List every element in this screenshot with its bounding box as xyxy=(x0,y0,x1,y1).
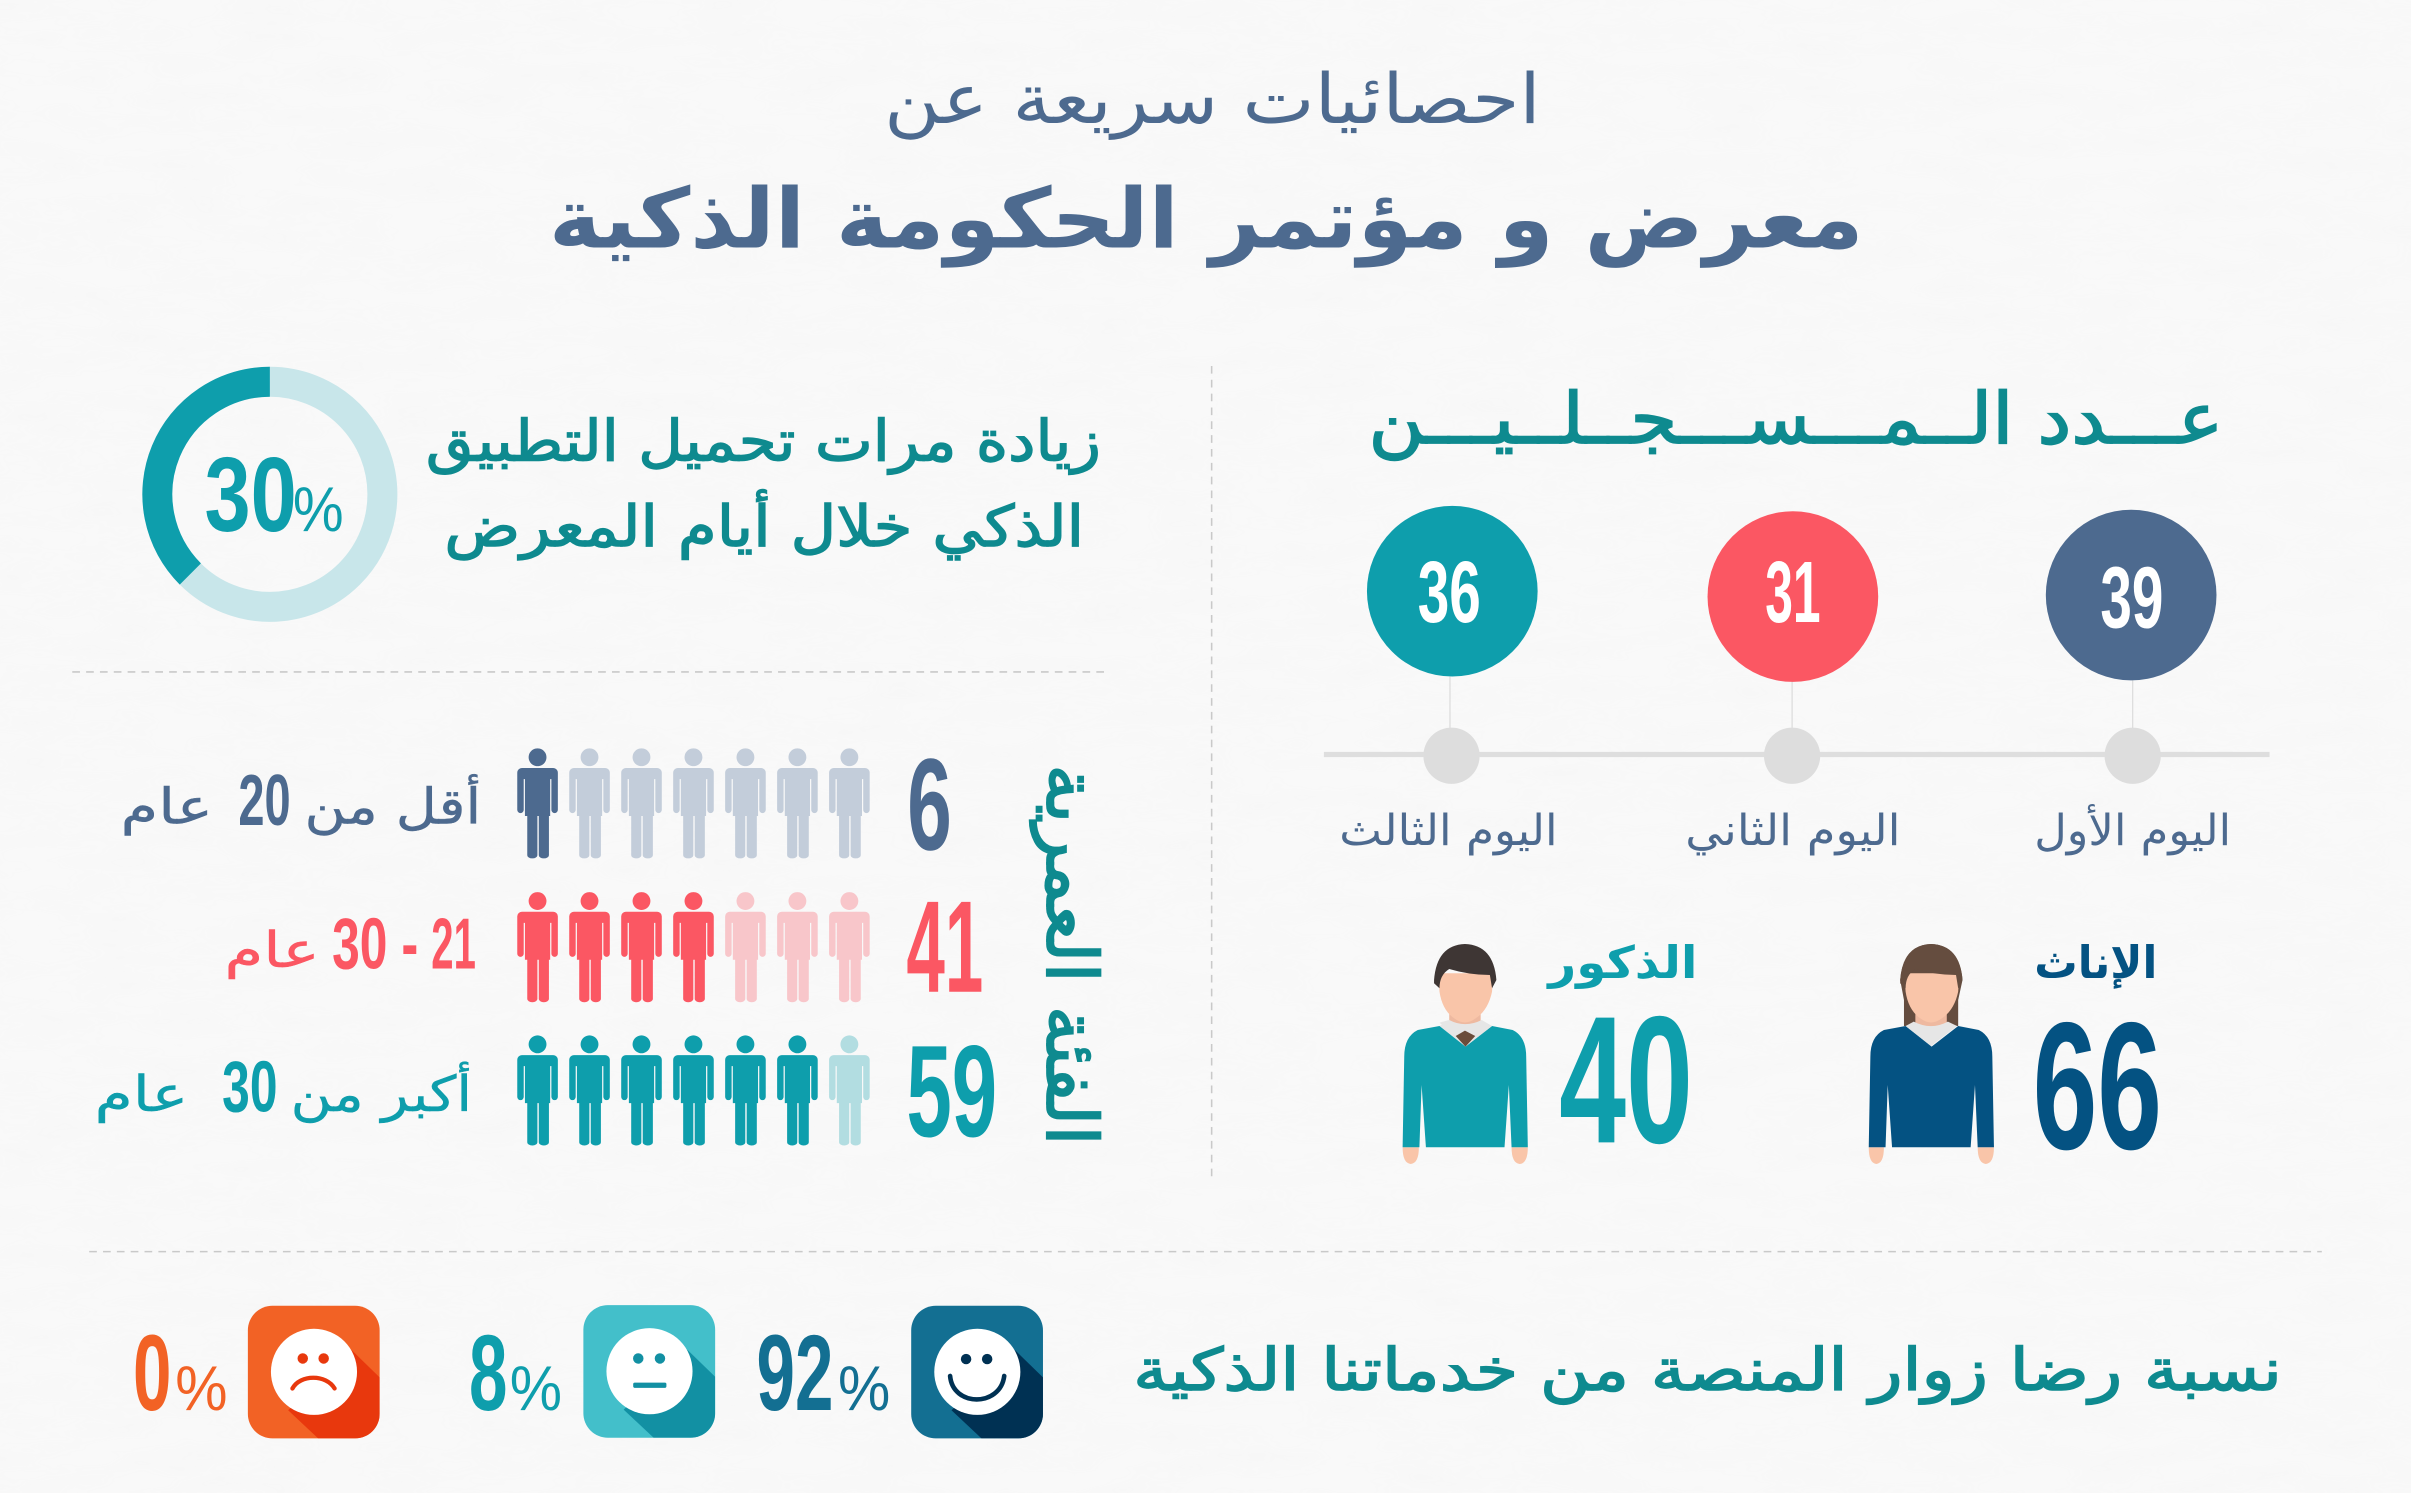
donut chart xyxy=(157,382,382,607)
day 2 circle: 31 xyxy=(1765,543,1821,641)
app text xyxy=(426,409,1101,560)
app text: الذكي خلال أيام المعرض xyxy=(444,489,1084,560)
label: over 30 xyxy=(95,1048,472,1128)
day labels: اليوم الثالث xyxy=(1339,806,1558,856)
day labels: اليوم الثاني xyxy=(1685,806,1901,856)
label: 21-30: عام xyxy=(224,921,320,979)
donut chart: % xyxy=(293,475,344,545)
value: 8 percent: 8 xyxy=(469,1313,507,1433)
label: under 20: 20 xyxy=(238,761,291,841)
value: 8 percent xyxy=(469,1313,562,1433)
male label: الذكور xyxy=(1546,937,1698,989)
day 3 circle: 36 xyxy=(1418,543,1481,641)
label: 21-30: 21 xyxy=(431,904,476,984)
day 2 circle xyxy=(1708,511,1878,682)
value: 8 percent: % xyxy=(510,1354,562,1424)
label: 21-30: 30 xyxy=(332,904,387,984)
label: over 30: أكبر من xyxy=(291,1062,472,1123)
label: 21-30: - xyxy=(401,904,418,984)
female count: 66 xyxy=(2033,986,2162,1188)
title xyxy=(549,60,1864,269)
male figure xyxy=(1403,944,1528,1164)
day labels xyxy=(1339,803,2231,856)
title: معرض و مؤتمر الحكومة الذكية xyxy=(549,171,1864,269)
panel: age groups xyxy=(95,732,1113,1164)
label: under 20: عام xyxy=(121,777,213,835)
label: under 20 xyxy=(121,761,481,841)
value: 59: 59 xyxy=(906,1018,997,1164)
female figure xyxy=(1869,944,1994,1164)
satisfaction text: نسبة رضا زوار المنصة من خدماتنا الذكية xyxy=(1133,1336,2282,1405)
value: 0 percent: 0 xyxy=(133,1313,171,1433)
value: 92 percent: 92 xyxy=(757,1313,833,1433)
panel: app downloads xyxy=(157,382,1101,607)
value: 92 percent: % xyxy=(838,1354,890,1424)
label: over 30: عام xyxy=(95,1065,188,1123)
panel: satisfaction xyxy=(133,1305,2282,1438)
day 1 circle: 39 xyxy=(2100,548,2163,646)
timeline xyxy=(1324,677,2270,784)
value: 6: 6 xyxy=(907,732,952,878)
icon: happy face xyxy=(911,1306,1043,1438)
divider lines xyxy=(72,366,2322,1252)
female label: الإناث xyxy=(2034,937,2157,989)
pictogram: 4 of 7 xyxy=(517,892,870,1002)
icon: neutral face xyxy=(583,1305,715,1438)
pictogram: 6 of 7 xyxy=(517,1035,870,1146)
row: over 30 xyxy=(95,1018,997,1164)
title: احصائيات سريعة عن xyxy=(884,60,1541,140)
heading: registered: عـــدد الــمـــســـجــلــيـــن xyxy=(1368,377,2223,461)
pictogram: 1 of 7 xyxy=(517,748,870,858)
male count: 40 xyxy=(1559,979,1693,1181)
value: 41: 41 xyxy=(906,874,983,1020)
value: 0 percent xyxy=(133,1313,228,1433)
day labels: اليوم الأول xyxy=(2034,803,2231,856)
donut chart: 30 xyxy=(205,436,297,554)
app text: زيادة مرات تحميل التطبيق xyxy=(426,409,1101,475)
day 1 circle xyxy=(2046,510,2216,680)
icon: sad face xyxy=(248,1306,380,1438)
label: under 20: أقل من xyxy=(304,774,481,835)
row: under 20 xyxy=(121,732,952,878)
day 3 circle xyxy=(1367,506,1538,677)
panel: registered count xyxy=(1324,377,2270,1188)
value: 0 percent: % xyxy=(175,1354,228,1424)
label: over 30: 30 xyxy=(222,1048,278,1128)
row: 21-30 xyxy=(224,874,983,1020)
label: 21-30 xyxy=(224,904,476,984)
heading: age group: الفئة العمرية xyxy=(1029,764,1113,1146)
